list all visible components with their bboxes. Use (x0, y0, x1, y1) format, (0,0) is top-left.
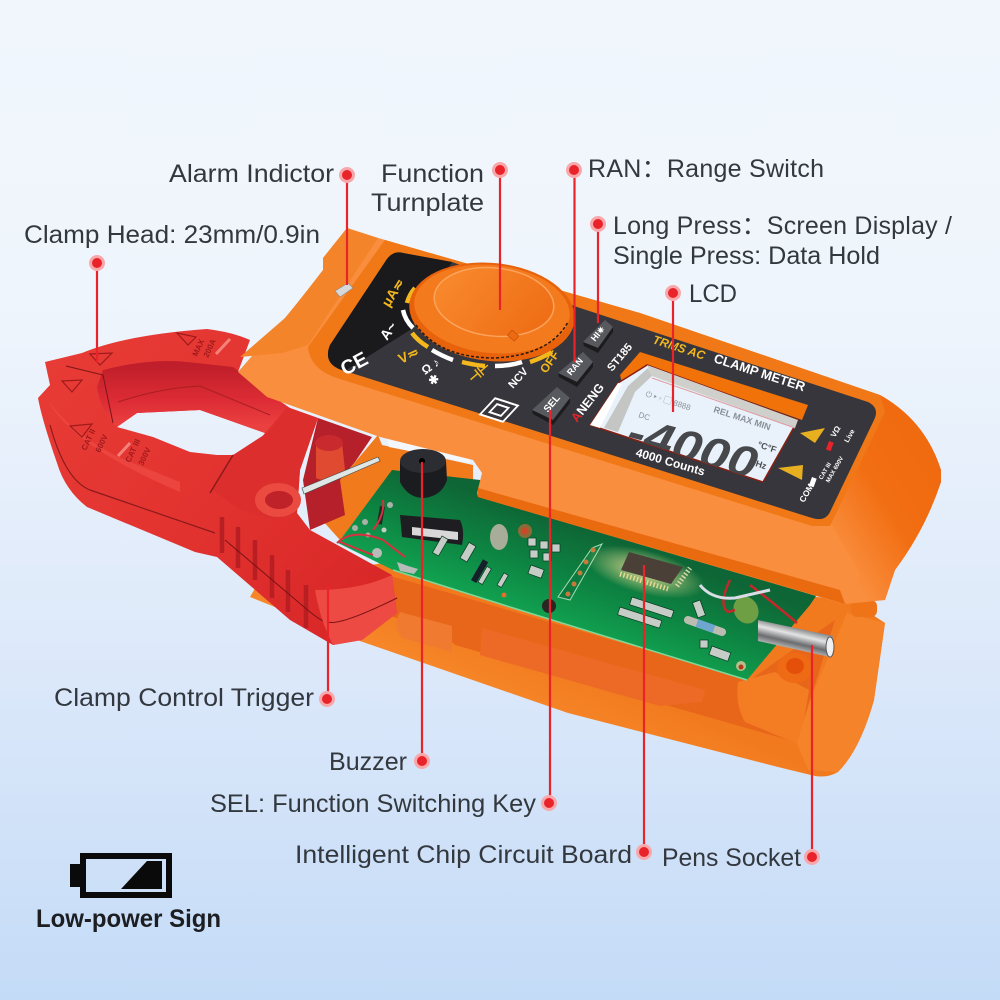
button: RAN (558, 352, 593, 387)
clamp head and trigger: 600V (94, 433, 110, 454)
LCD screen: °C°F (756, 439, 778, 455)
low-power caption: Low-power Sign (36, 905, 221, 933)
label: Clamp Head: Clamp Head: 23mm/0.9in (24, 221, 320, 249)
leader lines (97, 170, 812, 857)
dial labels: OFF (537, 348, 562, 376)
inner wall (97, 361, 287, 433)
warning triangles and socket labels: Live (844, 428, 857, 444)
clamp head and trigger (38, 329, 397, 645)
label: Intelligent Chip Circuit Board: Intelligent Chip Circuit Board (295, 841, 632, 869)
model and brand text: TRMS AC (651, 333, 707, 363)
upper bezel (308, 240, 885, 526)
LCD screen (590, 352, 808, 489)
inner cavity (370, 570, 835, 743)
dial labels: ⊣⊢ (465, 358, 494, 386)
trigger end cap (315, 575, 397, 645)
button: SEL: SEL (542, 393, 563, 415)
green capacitor (729, 592, 763, 628)
button: SEL (532, 387, 570, 425)
label: Clamp Head (24, 221, 320, 270)
clamp head and trigger: 300V (137, 446, 153, 467)
mounting screw (542, 599, 556, 613)
dial labels: NCV (506, 365, 531, 391)
icon: low battery (70, 856, 169, 895)
label: LCD (666, 280, 737, 308)
model and brand text (568, 333, 808, 479)
clamp head and trigger: 200A (202, 338, 218, 359)
LCD screen: REL MAX MIN (712, 404, 772, 432)
model and brand text: ST185 (605, 341, 635, 374)
solder blobs and wires at left (337, 500, 418, 574)
button: RAN: RAN (565, 356, 585, 377)
dial labels (376, 275, 562, 391)
LCD screen: DC (637, 410, 651, 423)
small board components (425, 469, 731, 661)
label: Function Turnplate: Turnplate (371, 189, 484, 217)
label: Long Press / Single Press: Long Press：Screen Display / (613, 212, 952, 240)
jaw seams and markings (66, 366, 113, 423)
dial labels: Ω ♪ (419, 355, 442, 377)
spring post and pin (316, 443, 345, 480)
label: RAN Range Switch: RAN：Range Switch (588, 155, 824, 183)
button: HI (583, 320, 613, 353)
LCD screen: Hz (754, 458, 768, 471)
dial labels: μA≂ (378, 275, 408, 310)
label: Clamp Control Trigger: Clamp Control Trigger (54, 684, 314, 712)
model and brand text: ANENG (568, 381, 607, 425)
warning triangles and socket labels (778, 424, 857, 504)
clamp head and trigger: CAT II (80, 428, 97, 452)
label: Long Press / Single Press (592, 212, 952, 270)
jaw body (38, 329, 397, 645)
top case of meter (238, 228, 941, 604)
end cap shading (830, 395, 941, 604)
buzzer (400, 449, 447, 498)
dial labels: A~ (376, 319, 400, 343)
button: HI: HI✷ (589, 324, 607, 343)
lower jaw highlight (48, 400, 180, 492)
label: Function Turnplate (371, 160, 506, 217)
gap behind buzzer (387, 438, 470, 463)
hinge peg (851, 600, 877, 617)
front-left facet (240, 228, 378, 357)
clamp head and trigger: MAX (191, 337, 207, 358)
control panel (328, 252, 876, 519)
resistor (688, 620, 722, 632)
LCD screen: -4000 (622, 407, 763, 489)
screw post (777, 653, 813, 683)
model and brand text: CLAMP METER (712, 351, 808, 394)
wires (723, 580, 797, 623)
lower lip (478, 488, 845, 604)
circuit board (337, 469, 834, 680)
dial labels: ✱ (426, 371, 442, 388)
label: Alarm Indictor: Alarm Indictor (169, 160, 334, 188)
dial labels: V≂ (396, 343, 421, 367)
dial scale arcs (403, 288, 552, 366)
label: Buzzer: Buzzer (329, 748, 407, 776)
label: SEL: SEL: Function Switching Key (210, 790, 537, 818)
warning triangles and socket labels: VΩ (829, 424, 843, 439)
pens socket tube (758, 620, 834, 657)
LCD screen: ⏻ ▸ ◦ ▢ 8888 (644, 389, 692, 413)
dark mechanism behind post (303, 418, 372, 530)
model and brand text: 4000 Counts (634, 445, 707, 479)
label: Pens Socket: Pens Socket (662, 844, 801, 872)
glowing chip (579, 535, 711, 609)
trigger grip (222, 517, 306, 628)
warning triangles and socket labels: COM (797, 482, 816, 504)
label: Function Turnplate: Function (381, 160, 484, 188)
warning triangles and socket labels: MAX 600V (826, 456, 845, 484)
pivot (213, 407, 318, 520)
alarm light (335, 283, 353, 297)
CE mark: CE (337, 348, 372, 380)
pin header (558, 544, 602, 600)
label: LCD: LCD (689, 280, 737, 308)
function turnplate knob (404, 255, 580, 369)
back wall behind buzzer (322, 435, 473, 540)
warning triangles and socket labels: CAT III (819, 462, 833, 481)
right wall (797, 613, 885, 772)
capacitor (400, 515, 463, 545)
double insulation icon (480, 398, 518, 422)
lower case of meter (250, 560, 885, 776)
clamp head and trigger: CAT III (124, 438, 142, 464)
label: Long Press / Single Press: Single Press: Data Hold (613, 242, 880, 270)
